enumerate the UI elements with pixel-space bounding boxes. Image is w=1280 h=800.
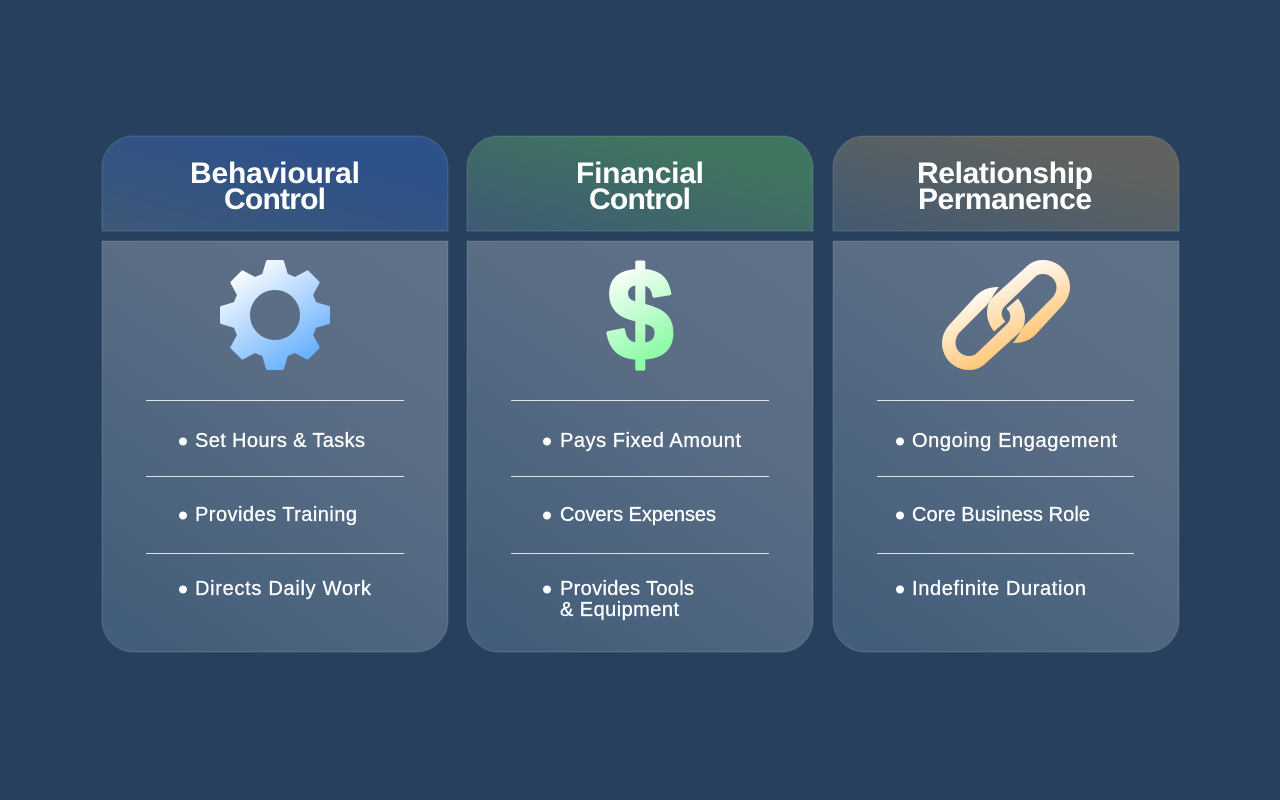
item: Indefinite Duration: Indefinite Duration xyxy=(912,578,1086,600)
icon: dollar sign: $ xyxy=(607,242,673,387)
item: Set Hours & Tasks: Set Hours & Tasks xyxy=(195,430,365,452)
item: Provides Tools & Equipment: Provides Tools xyxy=(560,578,694,600)
item: Directs Daily Work: Directs Daily Work xyxy=(195,578,372,600)
header: Relationship Permanence: Relationship xyxy=(917,157,1093,190)
header: Financial Control xyxy=(467,136,813,231)
item: Provides Tools & Equipment xyxy=(543,578,694,621)
header: Financial Control: Control xyxy=(589,183,691,216)
item: Provides Tools & Equipment: & Equipment xyxy=(560,599,679,621)
body: Financial Control xyxy=(467,241,813,652)
header: Behavioural Control xyxy=(102,136,448,231)
panel: Behavioural Control xyxy=(102,136,448,652)
panel: Financial Control xyxy=(467,136,813,652)
body: Relationship Permanence xyxy=(833,241,1179,652)
header: Relationship Permanence: Permanence xyxy=(918,183,1092,216)
item: Provides Training: Provides Training xyxy=(195,504,357,526)
body: Behavioural Control xyxy=(102,241,448,652)
item: Covers Expenses: Covers Expenses xyxy=(560,504,716,526)
header: Relationship Permanence xyxy=(833,136,1179,231)
item: Ongoing Engagement: Ongoing Engagement xyxy=(912,430,1117,452)
panel: Relationship Permanence xyxy=(833,136,1179,652)
item: Pays Fixed Amount: Pays Fixed Amount xyxy=(560,430,741,452)
header: Behavioural Control: Control xyxy=(224,183,326,216)
icon: chain link xyxy=(942,260,1070,370)
header: Financial Control: Financial xyxy=(576,157,704,190)
header: Behavioural Control: Behavioural xyxy=(190,157,360,190)
item: Core Business Role: Core Business Role xyxy=(912,504,1090,526)
icon: gear xyxy=(222,262,328,368)
